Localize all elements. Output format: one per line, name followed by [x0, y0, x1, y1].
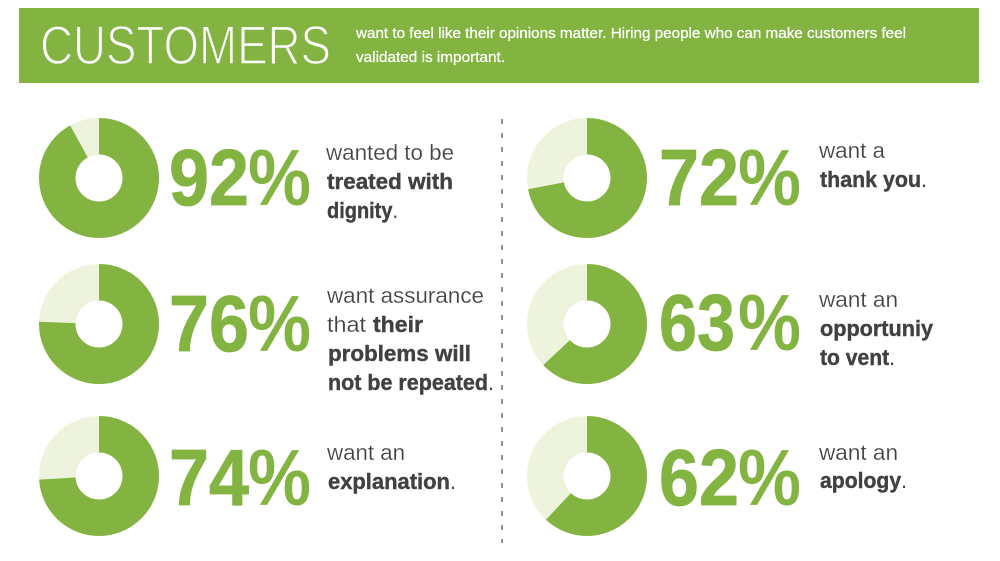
- label: 76%: [326, 283, 494, 395]
- percentage: 62%: %: [738, 433, 801, 522]
- percentage: 74%: %: [248, 433, 311, 522]
- header banner: [19, 8, 979, 83]
- donut chart: 72%: [545, 136, 629, 220]
- percentage: 92%: [169, 133, 311, 222]
- percentage: 74%: [169, 433, 311, 522]
- stat: 92%: [57, 133, 454, 223]
- header description: validated is important.: [356, 49, 505, 66]
- stat: 76%: [57, 279, 494, 395]
- label: 74%: [326, 440, 456, 494]
- label: 74%: want an: [326, 440, 405, 465]
- stat: 62%: [545, 433, 907, 522]
- donut chart: 63%: [545, 282, 629, 366]
- percentage: 92%: %: [248, 133, 311, 222]
- label: 72%: thank you.: [820, 167, 927, 192]
- label: 63%: opportuniy: [820, 316, 933, 341]
- percentage: 76%: [169, 279, 311, 368]
- percentage: 72%: 72: [659, 133, 739, 222]
- percentage: 76%: 76: [169, 279, 249, 368]
- donut chart: 74%: [57, 434, 141, 518]
- label: 72%: [818, 138, 927, 192]
- center dashed divider: [501, 119, 503, 543]
- percentage: 72%: %: [738, 133, 801, 222]
- header description: want to feel like their opinions matter. Hiring people who can make customers feel: [355, 25, 906, 42]
- percentage: 74%: 74: [169, 433, 249, 522]
- header description: [355, 25, 906, 66]
- donut chart: 62%: [545, 434, 629, 518]
- label: 76%: want assurance: [326, 283, 484, 308]
- stat: 72%: [545, 133, 927, 222]
- label: 63%: to vent.: [820, 345, 895, 370]
- stat: 74%: [57, 433, 456, 522]
- percentage: 92%: 92: [169, 133, 249, 222]
- percentage: 63%: %: [738, 278, 801, 367]
- label: 74%: explanation.: [328, 469, 456, 494]
- percentage: 62%: 62: [659, 433, 739, 522]
- donut chart: 76%: [57, 282, 141, 366]
- label: 63%: [818, 287, 933, 370]
- label: 92%: [325, 140, 454, 223]
- title: CUSTOMERS: [40, 14, 331, 76]
- label: 76%: problems will: [328, 341, 471, 366]
- label: 62%: want an: [818, 440, 898, 465]
- label: 92%: wanted to be: [325, 140, 454, 165]
- donut chart: 92%: [57, 136, 141, 220]
- label: 63%: want an: [818, 287, 898, 312]
- label: 92%: treated with: [327, 169, 453, 194]
- percentage: 62%: [659, 433, 801, 522]
- label: 76%: that: [327, 312, 366, 337]
- stat: 63%: [545, 278, 933, 370]
- label: 92%: dignity.: [327, 198, 398, 223]
- label: 76%: their: [373, 312, 423, 337]
- percentage: 76%: %: [248, 279, 311, 368]
- percentage: 72%: [659, 133, 801, 222]
- label: 62%: apology.: [820, 468, 907, 493]
- label: 76%: not be repeated.: [328, 370, 494, 395]
- percentage: 63%: [659, 278, 801, 367]
- label: 72%: want a: [818, 138, 886, 163]
- percentage: 63%: 63: [659, 278, 735, 367]
- label: 62%: [818, 440, 907, 493]
